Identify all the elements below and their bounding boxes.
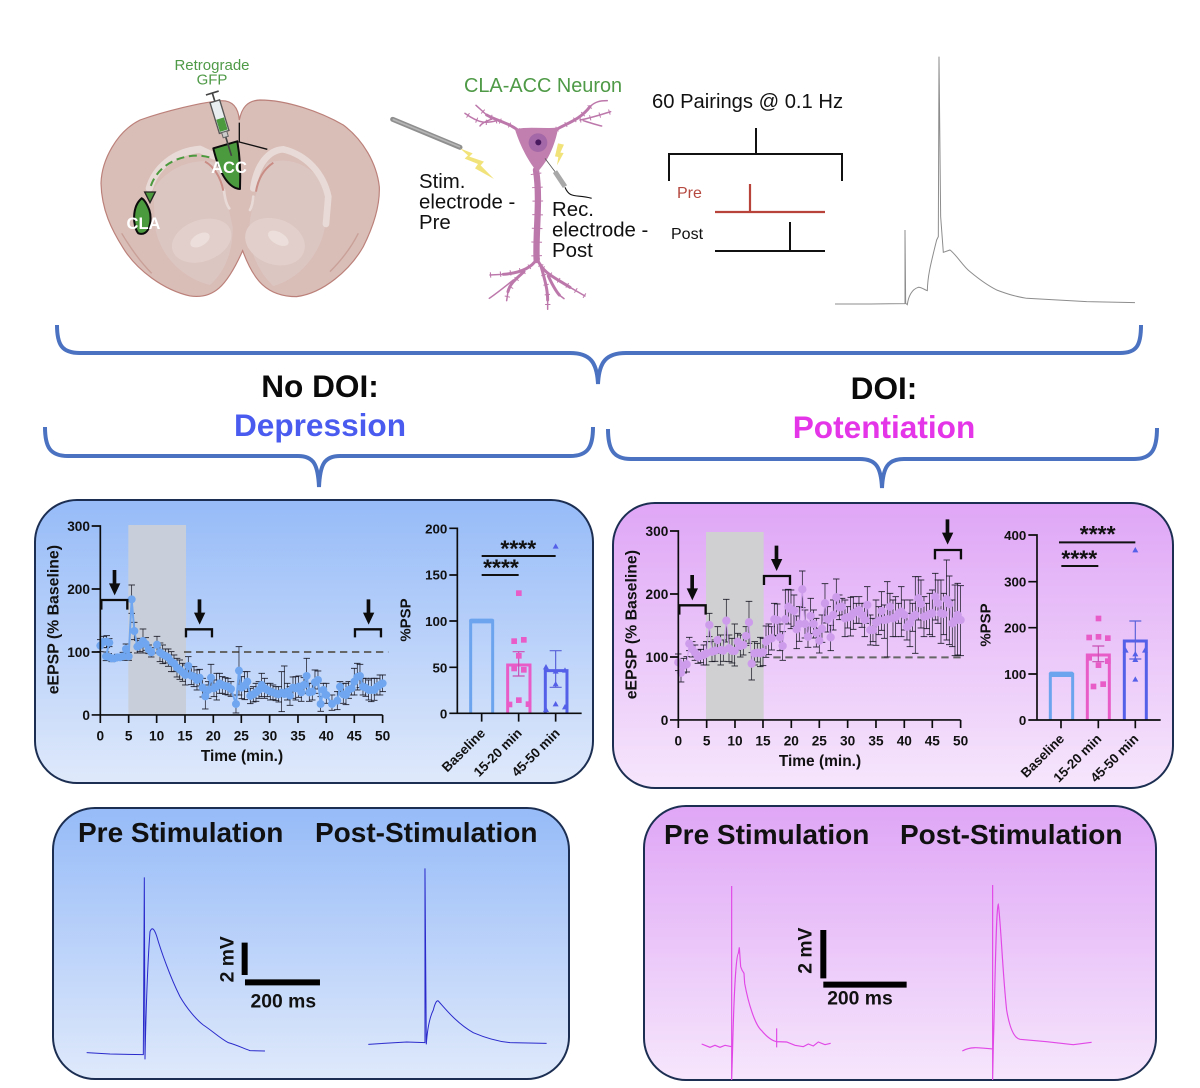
data series <box>678 589 961 673</box>
triangle points <box>543 543 568 712</box>
traces <box>702 885 1092 1080</box>
protocol heading: 60 Pairings @ 0.1 Hz <box>652 91 843 113</box>
label: rec electrode: electrode - <box>552 220 648 242</box>
heading: Depression: Depression <box>234 407 406 443</box>
x axis title: Time (min.) <box>201 748 283 765</box>
y tick labels: 0 <box>1019 713 1026 728</box>
neuron dendrites <box>465 101 611 309</box>
axes <box>670 531 961 728</box>
category labels: 45-50 min <box>509 725 563 780</box>
chart: %PSP bars, No DOI <box>398 521 582 780</box>
neuron soma <box>515 127 558 172</box>
y tick labels: 300 <box>67 519 90 534</box>
label: 200 ms: 200 ms <box>827 988 893 1009</box>
points <box>507 590 531 707</box>
y axis title: %PSP <box>978 603 995 647</box>
significance stars: **** <box>500 535 536 561</box>
heading: Potentiation: Potentiation <box>793 409 975 445</box>
title: Pre Stimulation: Pre Stimulation <box>78 817 283 848</box>
lateral cortex creases <box>122 233 358 273</box>
axes <box>1028 535 1161 728</box>
error bars <box>1092 646 1104 662</box>
x tick labels: 25 <box>812 733 827 748</box>
x tick labels: 25 <box>234 728 249 743</box>
y tick labels: 100 <box>646 650 669 665</box>
45-50 min bar <box>545 671 567 713</box>
pre trace <box>87 877 265 1059</box>
ACC region <box>213 141 240 189</box>
top bracket <box>57 325 1141 384</box>
significance stars: **** <box>1080 521 1116 547</box>
ventricles <box>205 162 273 192</box>
example spike trace <box>835 57 1135 305</box>
label: 2 mV: 2 mV <box>795 927 816 974</box>
scale bars <box>245 943 320 982</box>
axes <box>449 528 582 722</box>
15-20 min bar <box>508 665 530 713</box>
x tick labels: 15 <box>177 728 193 743</box>
pre trace <box>702 886 831 1080</box>
caudate ellipses <box>166 210 312 273</box>
baseline bar <box>471 621 493 713</box>
x axis title: Time (min.) <box>779 753 861 770</box>
significance lines <box>1059 542 1135 566</box>
Post pulse <box>715 222 825 251</box>
projection dashed arrow <box>145 156 209 203</box>
x tick labels: 50 <box>375 728 391 743</box>
points <box>1086 616 1111 689</box>
significance stars: **** <box>483 554 519 580</box>
traces <box>87 868 547 1059</box>
x tick labels: 10 <box>149 728 165 743</box>
heading: DOI: DOI: <box>851 370 917 406</box>
category labels <box>439 725 563 780</box>
15-20 min bar <box>1087 655 1109 720</box>
CLA region <box>134 198 151 234</box>
panel: DOI example traces <box>644 806 1156 1080</box>
x tick labels <box>97 728 391 743</box>
y tick labels: 200 <box>67 582 90 597</box>
y tick labels <box>1004 528 1026 728</box>
y tick labels <box>646 524 669 728</box>
title: Post-Stimulation: Post-Stimulation <box>315 817 537 848</box>
y tick labels: 0 <box>661 713 669 728</box>
baseline cap <box>1049 672 1074 677</box>
brackets <box>101 600 381 637</box>
baseline dashed line <box>184 649 388 655</box>
x tick labels: 20 <box>206 728 221 743</box>
45-50 min bar <box>1124 641 1146 720</box>
arrows <box>109 570 374 625</box>
baseline bar <box>1050 674 1073 720</box>
error bars <box>678 560 961 682</box>
baseline dashed line <box>773 654 964 660</box>
title: Pre Stimulation: Pre Stimulation <box>664 819 869 850</box>
baseline cap <box>469 619 494 623</box>
category labels: 15-20 min <box>1050 731 1104 785</box>
y tick labels <box>425 521 447 721</box>
x tick labels: 0 <box>97 728 105 743</box>
label: Retrograde GFP: Retrograde <box>174 57 250 74</box>
category labels <box>1018 731 1141 785</box>
significance stars <box>1061 521 1116 571</box>
x tick labels: 0 <box>675 733 683 748</box>
chart: eEPSP time course, DOI <box>624 519 969 770</box>
label: 2 mV: 2 mV <box>217 936 238 982</box>
x tick labels: 10 <box>727 733 743 748</box>
Post label: Post <box>671 226 704 243</box>
panel: DOI time course and bars <box>613 503 1173 788</box>
x tick labels: 30 <box>262 728 278 743</box>
x tick labels: 30 <box>840 733 856 748</box>
triangle points <box>1123 547 1148 682</box>
y tick labels: 200 <box>425 521 447 536</box>
stim electrode <box>393 119 460 147</box>
y axis title: %PSP <box>398 598 415 642</box>
y axis title: eEPSP (% Baseline) <box>624 550 641 699</box>
x tick labels: 40 <box>897 733 912 748</box>
heading: No DOI: No DOI: <box>261 368 379 404</box>
y tick labels: 200 <box>646 587 669 602</box>
label: Retrograde GFP: GFP <box>197 72 227 88</box>
Pre pulse <box>715 184 825 212</box>
y tick labels: 100 <box>1004 667 1026 682</box>
error bars <box>100 585 383 713</box>
x tick labels: 5 <box>703 733 711 748</box>
category labels: Baseline <box>439 725 488 775</box>
y tick labels: 150 <box>425 568 447 583</box>
lightning: rec <box>555 143 564 165</box>
label: rec electrode: Post <box>552 240 593 262</box>
label: stim electrode: Stim. <box>419 171 465 193</box>
significance stars <box>483 535 536 580</box>
significance lines <box>482 556 556 575</box>
y tick labels: 100 <box>67 645 90 660</box>
post trace <box>962 885 1092 1080</box>
stimulation window <box>128 525 186 714</box>
error bars <box>513 652 525 676</box>
neuron spines <box>465 105 611 309</box>
y tick labels: 50 <box>433 660 447 675</box>
y tick labels: 400 <box>1004 528 1026 543</box>
striatum regions <box>153 161 328 286</box>
panel: No DOI time course and bars <box>35 500 593 783</box>
x tick labels: 15 <box>755 733 771 748</box>
category labels: 45-50 min <box>1087 731 1141 785</box>
label: stim electrode: Pre <box>419 212 451 234</box>
category labels: Baseline <box>1018 731 1067 781</box>
y axis title: eEPSP (% Baseline) <box>46 545 63 694</box>
x tick labels: 35 <box>290 728 306 743</box>
x tick labels <box>675 733 969 748</box>
label: stim electrode: electrode - <box>419 192 515 214</box>
Pre label: Pre <box>677 185 702 202</box>
chart: eEPSP time course, No DOI <box>46 519 391 765</box>
y tick labels: 200 <box>1004 621 1026 636</box>
y tick labels <box>67 519 90 723</box>
x tick labels: 45 <box>925 733 940 748</box>
title: Post-Stimulation: Post-Stimulation <box>900 819 1122 850</box>
label: ACC: ACC <box>211 159 247 177</box>
brain outline <box>101 100 379 297</box>
neuron nucleus <box>529 133 547 152</box>
right bracket <box>608 428 1157 488</box>
lightning: stim <box>460 148 494 179</box>
pairing protocol <box>652 91 843 251</box>
ACC pointer lines <box>239 123 267 149</box>
x tick labels: 5 <box>125 728 133 743</box>
protocol bracket <box>669 128 842 181</box>
label: rec electrode: Rec. <box>552 199 594 221</box>
neuron illustration <box>393 101 611 309</box>
heading: CLA-ACC Neuron: CLA-ACC Neuron <box>464 75 622 97</box>
icon: syringe <box>206 91 238 158</box>
panel: No DOI example traces <box>53 808 569 1079</box>
y tick labels: 0 <box>440 706 447 721</box>
post trace <box>368 868 547 1044</box>
y tick labels: 0 <box>82 708 90 723</box>
arrows <box>687 519 953 600</box>
left bracket <box>45 427 593 487</box>
rec electrode <box>545 158 592 198</box>
x tick labels: 45 <box>347 728 362 743</box>
y tick labels: 300 <box>1004 574 1026 589</box>
chart: %PSP bars, DOI <box>978 521 1161 785</box>
brackets <box>679 550 961 615</box>
label: CLA: CLA <box>127 215 161 233</box>
x tick labels: 50 <box>953 733 969 748</box>
category labels: 15-20 min <box>471 725 525 780</box>
y tick labels: 300 <box>646 524 669 539</box>
scale bars <box>823 930 907 985</box>
axes <box>92 526 383 723</box>
x tick labels: 40 <box>319 728 334 743</box>
y tick labels: 100 <box>425 614 447 629</box>
stimulation window <box>706 532 764 720</box>
x tick labels: 35 <box>868 733 884 748</box>
corpus callosum <box>149 149 328 224</box>
data series <box>100 599 383 704</box>
label: 200 ms: 200 ms <box>251 992 316 1013</box>
significance stars: **** <box>1061 545 1097 571</box>
brain schematic <box>101 91 379 297</box>
x tick labels: 20 <box>784 733 799 748</box>
